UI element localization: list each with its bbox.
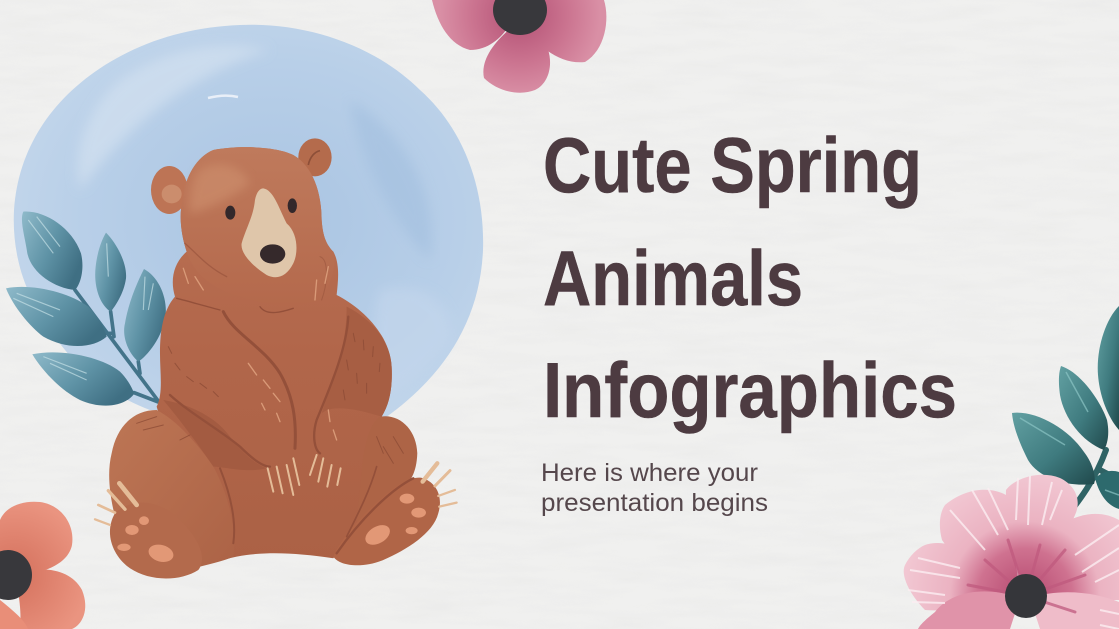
subtitle: presentation begins (541, 489, 768, 517)
petal rays (968, 540, 1085, 612)
bear nose (260, 244, 285, 264)
flower center (493, 0, 547, 35)
subtitle: Here is where your (541, 459, 758, 487)
bear claws (95, 455, 457, 525)
title: Animals (543, 234, 803, 322)
bear illustration (95, 138, 457, 579)
bear eyes (225, 198, 297, 220)
bear highlight strokes (183, 267, 337, 440)
flower: top pink (432, 0, 606, 93)
flower center (0, 550, 32, 600)
flower: bottom-right pink (904, 475, 1119, 629)
title: Cute Spring (543, 121, 922, 209)
watercolor blue blob (14, 25, 483, 418)
title (543, 121, 957, 434)
title: Infographics (543, 346, 957, 434)
bear body (109, 147, 440, 579)
petal stripes (908, 476, 1119, 629)
left leaf branch (6, 212, 166, 406)
flower center (1005, 574, 1047, 618)
right leaf branch (1012, 306, 1119, 522)
flower: bottom-left orange (0, 502, 85, 629)
bear fur marks (137, 333, 403, 463)
bear muzzle (242, 188, 296, 277)
bear fold lines (170, 243, 413, 553)
subtitle (541, 459, 768, 517)
bear paw pads (117, 494, 426, 565)
bear ears (151, 138, 332, 214)
